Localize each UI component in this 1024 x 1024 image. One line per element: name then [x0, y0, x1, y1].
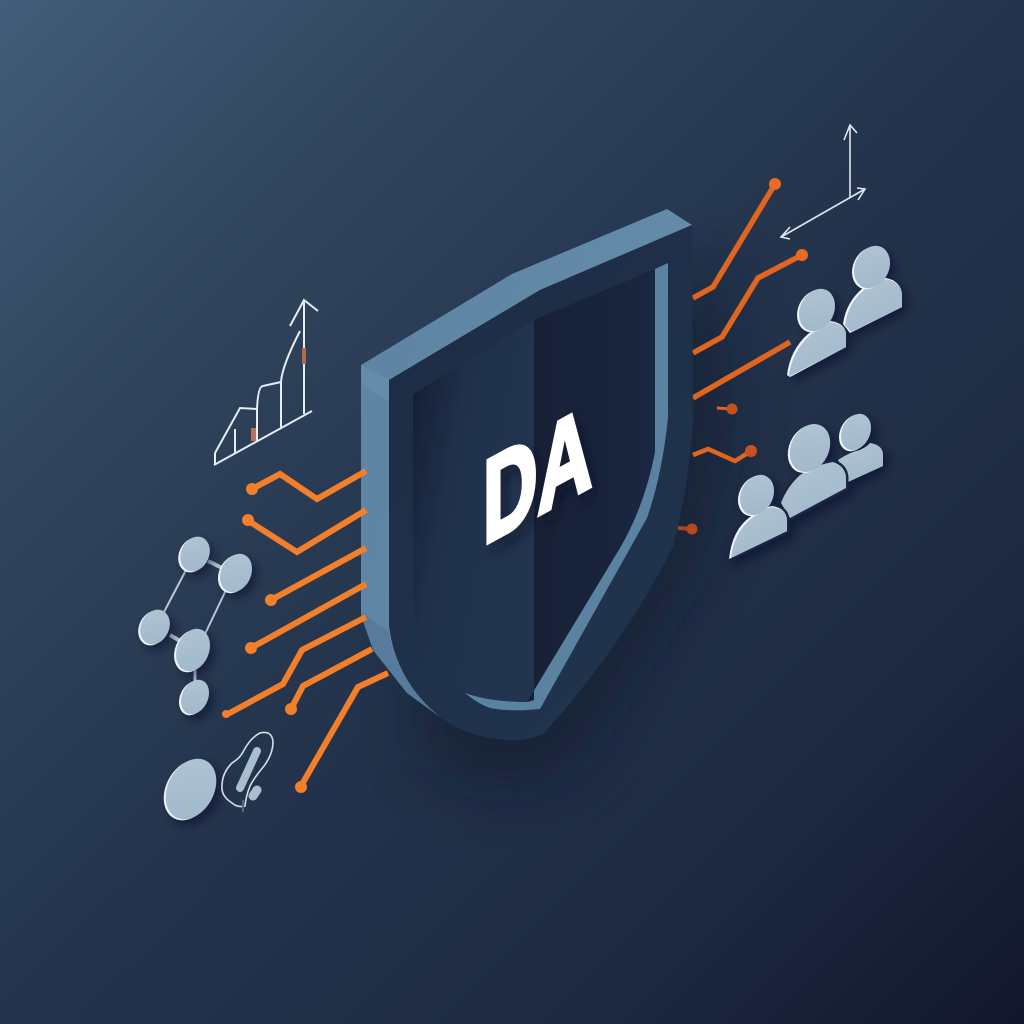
icon: line chart with axes: [214, 300, 318, 465]
circuit line r5: [693, 445, 757, 461]
shield lower bevel: [361, 612, 440, 717]
DA text: DA: [483, 379, 592, 570]
shield panel right half: [527, 269, 655, 702]
circuit line 5: [222, 617, 366, 718]
icon: outlined badge with exclamation: [222, 732, 273, 812]
right circuit lines: [678, 178, 808, 534]
circuit line 3: [265, 548, 366, 606]
circuit line r2: [693, 249, 808, 353]
icon: network nodes: [133, 532, 258, 720]
left circuit lines: [222, 471, 388, 793]
circuit line 1: [246, 471, 366, 499]
node circles: [133, 532, 258, 720]
shield inner rim: [465, 263, 668, 710]
person back: [843, 240, 902, 333]
circuit dot r4: [717, 404, 738, 414]
icon: large disc: [154, 750, 226, 829]
chart accents: [251, 348, 306, 441]
shield: [361, 209, 693, 740]
icon: people pair: [787, 240, 902, 377]
circuit line 2: [242, 510, 366, 552]
circuit line r1: [693, 178, 781, 298]
circuit dot r6: [678, 524, 698, 534]
circuit line 6: [285, 649, 372, 715]
shield side rim: [361, 209, 692, 717]
circuit line r3: [693, 342, 790, 398]
shield panel left half: [413, 320, 534, 702]
icon: coordinate axes: [781, 125, 865, 239]
person front: [787, 283, 846, 377]
shield drop shadow: [420, 260, 730, 790]
person b: [780, 417, 846, 518]
circuit line 4: [245, 584, 366, 654]
person a: [729, 469, 787, 559]
circuit line 7: [295, 673, 388, 793]
shield corner bevel: [361, 365, 389, 402]
icon: people trio: [729, 409, 883, 559]
DA text: DA: [489, 387, 598, 578]
node links: [164, 561, 226, 685]
shield front face: [389, 225, 693, 740]
person c: [833, 409, 883, 482]
